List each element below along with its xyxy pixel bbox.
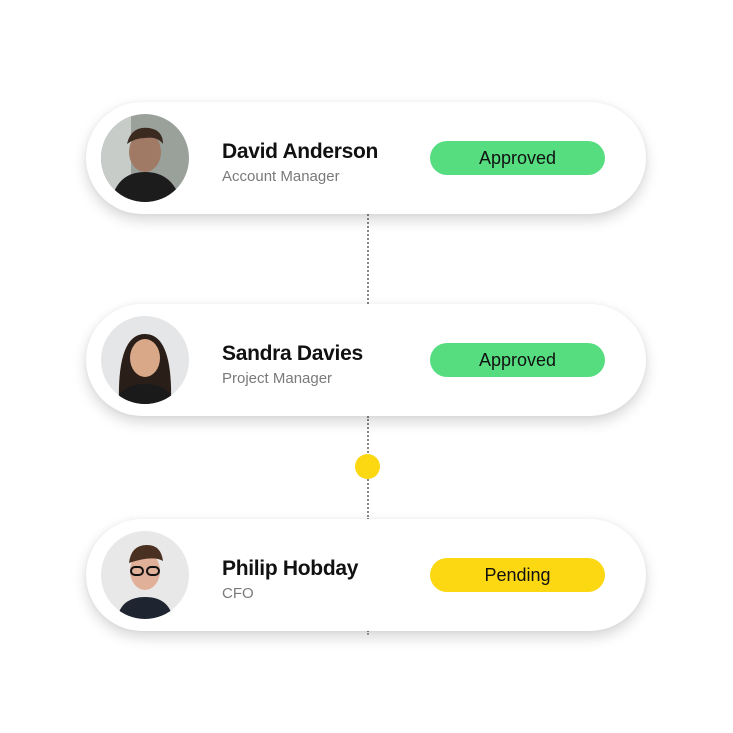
card: Sandra Davies <box>86 304 646 416</box>
role: Account Manager <box>222 168 340 185</box>
card: Philip Hobday <box>86 519 646 631</box>
role: Project Manager <box>222 370 332 387</box>
avatar: Sandra <box>101 316 189 404</box>
connector: 1 to 2 <box>367 214 369 304</box>
connector: below 3 <box>367 630 369 635</box>
status: approved <box>430 141 605 175</box>
status: approved: Approved <box>479 350 556 370</box>
avatar: Philip <box>101 531 189 619</box>
name: Philip Hobday <box>222 557 358 580</box>
status: pending: Pending <box>484 565 551 585</box>
connector: 2 to 3 <box>367 416 369 520</box>
role: CFO <box>222 585 254 602</box>
status: approved: Approved <box>479 148 556 168</box>
status dot <box>355 454 380 479</box>
avatar: David <box>101 114 189 202</box>
status: pending <box>430 558 605 592</box>
name: Sandra Davies <box>222 342 363 365</box>
name: David Anderson <box>222 140 378 163</box>
card: David Anderson <box>86 102 646 214</box>
status: approved <box>430 343 605 377</box>
